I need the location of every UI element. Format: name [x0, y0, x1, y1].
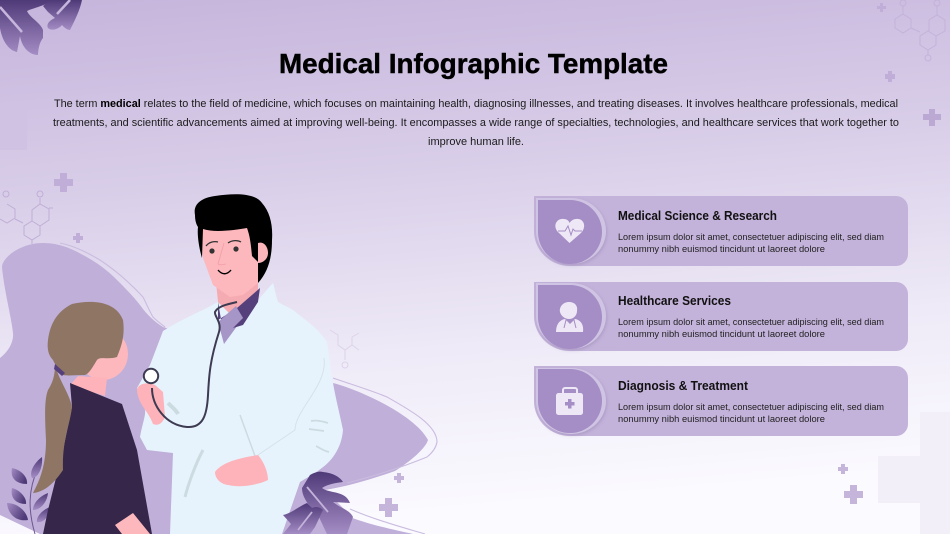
intro paragraph: treatments, and scientific advancements aimed at improving well-being. It encompasses a wide range of specialties, technologies, and healthcare services that work together to: [53, 117, 899, 129]
illustration: girl: [33, 302, 152, 534]
card heading: Medical Science & Research: [618, 209, 777, 223]
doctor smile: [218, 270, 231, 274]
doctor eyes and brows: [209, 248, 215, 254]
card heading: Healthcare Services: [618, 294, 731, 308]
monstera leaf bottom center: [283, 472, 353, 534]
icon: doctor: [556, 302, 583, 332]
title: Medical Infographic Template: [279, 48, 668, 79]
decorative molecule behind doctor: [330, 330, 359, 368]
icon: first aid kit: [556, 388, 583, 415]
doctor nose: [218, 243, 226, 265]
intro paragraph: [53, 98, 899, 148]
doctor shirt collar: [218, 302, 237, 325]
intro paragraph: The term medical relates to the field of medicine, which focuses on maintaining health, diagnosing illnesses, and treating diseases. It involves healthcare professionals, medical: [54, 98, 898, 110]
doctor hair: [195, 194, 272, 283]
stethoscope: [144, 302, 237, 427]
coat fold lines: [168, 358, 329, 497]
doctor face: [198, 220, 258, 297]
leaf plant bottom left: [7, 457, 50, 534]
girl arm: [115, 513, 150, 534]
doctor hand left: [137, 383, 165, 425]
card text: Lorem ipsum dolor sit amet, consectetuer adipiscing elit, sed diam: [618, 402, 884, 412]
decorative molecule left: [0, 191, 53, 244]
card text: nonummy nibh euismod tincidunt ut laoreet dolore: [618, 244, 825, 254]
panel: diagnosis and treatment: [534, 366, 908, 436]
decorative molecule top right: [895, 0, 945, 61]
card background: [534, 282, 908, 351]
doctor coat: [137, 283, 343, 534]
girl body: [43, 383, 152, 534]
card text: nonummy nibh euismod tincidunt ut laoreet dolore: [618, 414, 825, 424]
leaf top left: [0, 0, 82, 55]
doctor collar light: [218, 306, 243, 344]
doctor neck: [216, 280, 258, 314]
card text: [618, 232, 884, 254]
background wave blob: [0, 243, 437, 534]
card text: [618, 317, 884, 339]
girl neck: [70, 376, 107, 396]
icon: heart with pulse: [555, 219, 584, 243]
card background: [534, 366, 908, 436]
card text: Lorem ipsum dolor sit amet, consectetuer adipiscing elit, sed diam: [618, 317, 884, 327]
panel: medical science and research: [534, 196, 908, 266]
girl hair tie: [54, 364, 65, 376]
girl head: [78, 328, 128, 380]
card text: [618, 402, 884, 424]
card heading: Diagnosis & Treatment: [618, 379, 749, 393]
card text: Lorem ipsum dolor sit amet, consectetuer adipiscing elit, sed diam: [618, 232, 884, 242]
intro paragraph: improve human life.: [428, 136, 524, 148]
teardrop badge: [536, 368, 606, 434]
panel: healthcare services: [534, 282, 908, 351]
teardrop badge: [536, 198, 606, 264]
girl hair: [48, 302, 124, 375]
doctor ear: [258, 243, 268, 263]
card background: [534, 196, 908, 266]
card text: nonummy nibh euismod tincidunt ut laoreet dolore: [618, 329, 825, 339]
doctor hand right: [215, 455, 268, 486]
illustration: doctor: [137, 194, 343, 534]
girl ponytail: [33, 365, 72, 493]
teardrop badge: [536, 283, 606, 349]
